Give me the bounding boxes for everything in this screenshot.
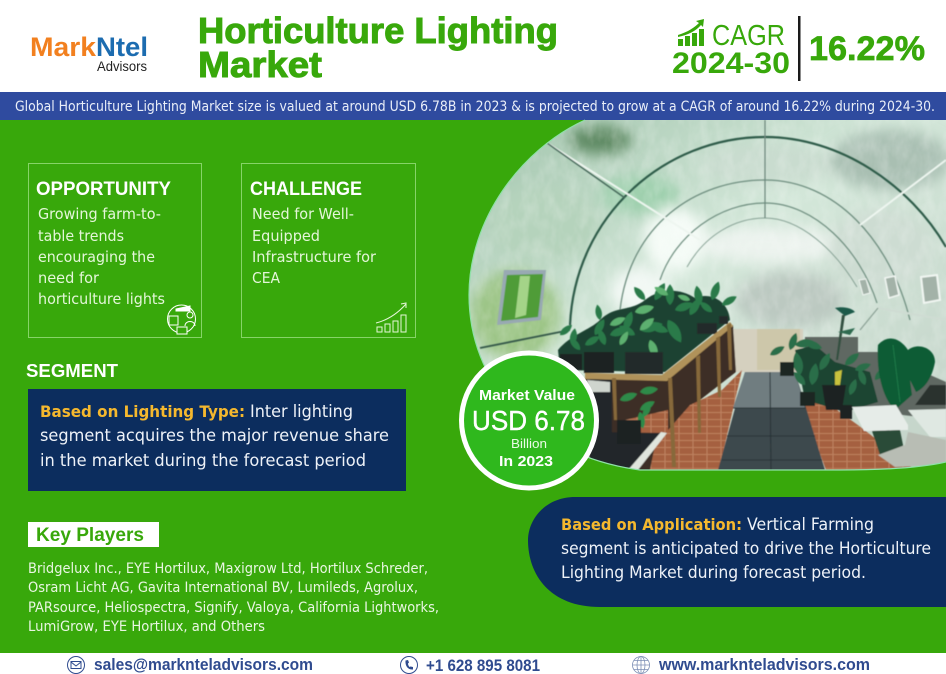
panel: challenge: Infrastructure for [252, 248, 377, 266]
panel: opportunity: OPPORTUNITY [36, 179, 171, 200]
mottled film texture [460, 120, 946, 380]
contact: website: www.marknteladvisors.com [658, 655, 870, 674]
back right plants [768, 332, 887, 396]
panel: opportunity [28, 164, 202, 338]
wooden table [585, 322, 733, 381]
panel: challenge: CHALLENGE [250, 179, 362, 200]
CAGR block: 2024-30 [672, 47, 790, 80]
CAGR block: CAGR [712, 20, 785, 52]
contact: email: sales@marknteladvisors.com [94, 655, 313, 674]
panel: lighting type segment: Based on Lighting Type: [40, 402, 245, 421]
badge: market value: USD 6.78 [472, 405, 585, 436]
lower bench [612, 432, 660, 468]
panel: opportunity: table trends [38, 227, 124, 245]
lower plant [619, 385, 659, 429]
CAGR block: 16.22% [809, 30, 925, 68]
panel: application segment [528, 497, 946, 607]
badge: market value: Billion [511, 436, 547, 451]
CAGR block [672, 16, 925, 81]
badge: market value: Market Value [479, 387, 575, 404]
photo: greenhouse interior [460, 120, 946, 475]
low right wall [805, 337, 946, 420]
title [198, 10, 558, 85]
panel: green main background [0, 120, 946, 653]
plants: leaves on table [558, 280, 738, 352]
dark under-table area [585, 325, 736, 470]
panel: application segment: Vertical Farming [747, 515, 874, 534]
logo: MarkNtel Advisors [30, 32, 148, 74]
panel: opportunity: need for [38, 269, 100, 287]
white trays [852, 405, 908, 431]
icon: globe with people [168, 305, 196, 334]
arches [480, 120, 946, 348]
text: key players list: Bridgelux Inc., EYE Hortilux, Maxigrow Ltd, Hortilux Schreder, [28, 561, 428, 577]
panel: lighting type segment: Inter lighting [250, 402, 353, 421]
bricks left [650, 370, 742, 470]
text: key players list: PARsource, Heliospectra, Signify, Valoya, California Lightworks, [28, 600, 439, 616]
panel: challenge: CEA [252, 269, 281, 287]
icon: rising bars [376, 303, 406, 332]
photo edge highlight [469, 120, 946, 470]
logo: MarkNtel Advisors: Mark [30, 32, 97, 62]
panel: challenge: Need for Well- [252, 205, 354, 223]
tray edge near table [587, 380, 610, 392]
logo: MarkNtel Advisors: Ntel [96, 32, 148, 62]
bricks right [805, 402, 912, 470]
text: key players list: LumiGrow, EYE Hortilux, and Others [28, 619, 265, 635]
windows [497, 270, 546, 325]
badge: market value: In 2023 [499, 454, 553, 470]
heading: segment: SEGMENT [26, 360, 119, 381]
banner: market summary [0, 92, 946, 120]
panel: lighting type segment: in the market during the forecast period [40, 451, 366, 470]
panel: application segment: segment is anticipated to drive the Horticulture [561, 539, 931, 558]
footer: contact bar [0, 653, 946, 674]
logo: MarkNtel Advisors: Advisors [97, 59, 147, 74]
panel: challenge: Equipped [252, 227, 320, 245]
title: Horticulture Lighting [198, 10, 558, 51]
text: key players list: Osram Licht AG, Gavita International BV, Lumileds, Agrolux, [28, 580, 418, 596]
text: key players list [28, 561, 439, 635]
panel: lighting type segment: segment acquires the major revenue share [40, 426, 389, 445]
back wall base [733, 329, 803, 372]
panel: lighting type segment [28, 389, 406, 491]
plants: left table foliage base [558, 291, 730, 372]
back right plant base [795, 345, 878, 412]
icon: growth chart [678, 19, 704, 46]
panel: opportunity: Growing farm-to- [38, 205, 161, 223]
heading: key players: Key Players [36, 525, 144, 546]
panel: application segment: Based on Application: [561, 515, 742, 534]
heading: key players [28, 522, 159, 547]
title: Market [198, 44, 322, 85]
under tray [872, 430, 904, 455]
badge: market value [459, 350, 599, 490]
pots on table [560, 354, 582, 370]
panel: opportunity: horticulture lights [38, 290, 165, 308]
panel: challenge [242, 164, 416, 338]
large leaf [878, 339, 935, 410]
panel: opportunity: encouraging the [38, 248, 155, 266]
path slabs [718, 372, 825, 470]
panel: application segment: Lighting Market during forecast period. [561, 563, 866, 582]
